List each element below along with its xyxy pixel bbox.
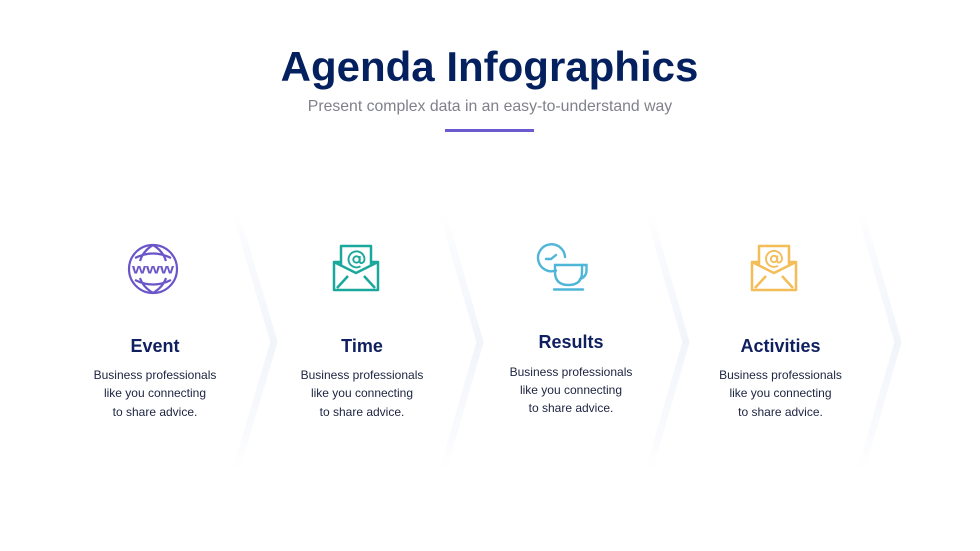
text: results body: Business professionals [510, 364, 632, 378]
subtitle: Present complex data in an easy-to-understand way [308, 98, 672, 115]
text: event body: Business professionals [94, 368, 216, 382]
title underline [445, 128, 534, 132]
text: activities body: to share advice. [738, 405, 823, 419]
text: activities body [719, 368, 842, 419]
heading: activities: Activities [740, 336, 821, 356]
text: event body: like you connecting [104, 386, 206, 400]
text: results body [510, 364, 632, 415]
icon: clock and cup [536, 243, 588, 291]
text: time body: like you connecting [311, 386, 413, 400]
text: event body: to share advice. [113, 405, 197, 419]
icon: globe www [128, 244, 178, 294]
text: event body [94, 368, 216, 419]
text: time body: Business professionals [301, 368, 423, 382]
heading: results: Results [538, 332, 604, 352]
text: activities body: Business professionals [719, 368, 842, 382]
title: Agenda Infographics [281, 43, 698, 90]
heading: time: Time [341, 336, 383, 356]
text: time body [301, 368, 423, 419]
text: activities body: like you connecting [729, 386, 832, 400]
icon: yellow envelope [750, 244, 798, 292]
icon: teal envelope [332, 244, 380, 292]
heading: event: Event [130, 336, 180, 356]
text: results body: to share advice. [529, 401, 613, 415]
text: time body: to share advice. [320, 405, 404, 419]
icon: globe www: www [131, 260, 174, 276]
text: results body: like you connecting [520, 383, 622, 397]
